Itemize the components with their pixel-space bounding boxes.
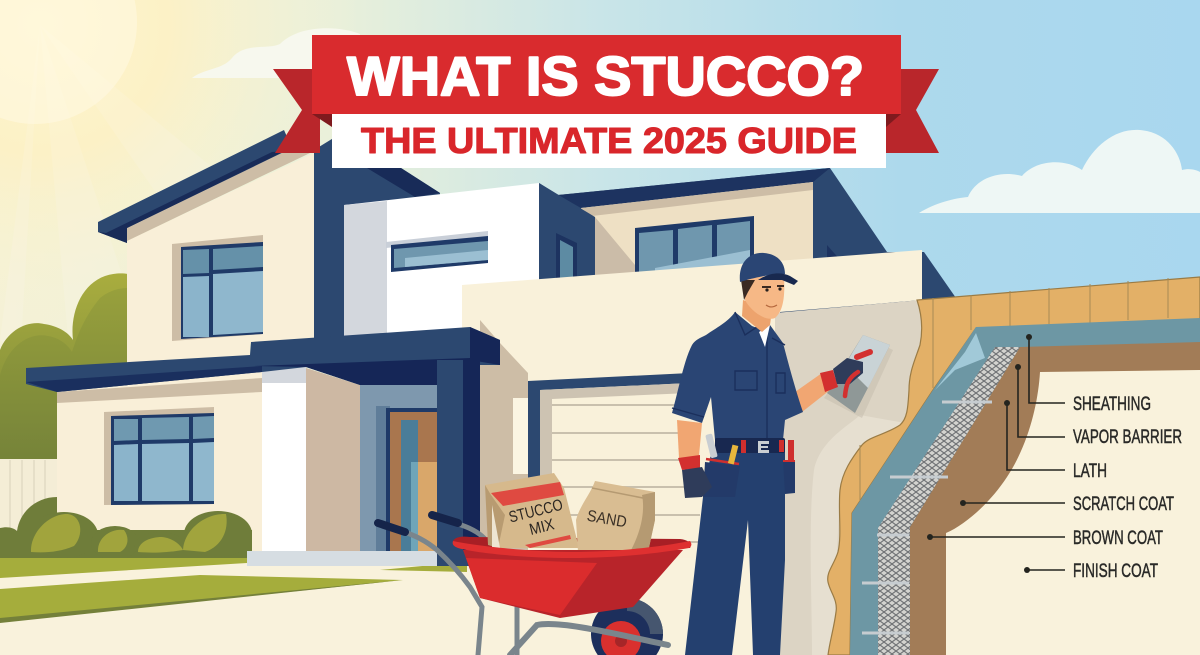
leader: brown coat <box>927 534 1065 540</box>
cutaway: vapor barrier <box>850 318 1200 655</box>
banner red title strip <box>312 35 901 114</box>
leader: finish coat <box>1024 567 1065 573</box>
bag: sand <box>576 481 655 552</box>
background trees <box>0 273 128 462</box>
cloud right <box>919 130 1200 213</box>
porch step <box>247 551 437 566</box>
wheelbarrow <box>453 541 691 655</box>
house: lower wall <box>57 372 262 552</box>
worker: legs <box>685 448 785 655</box>
window: upper left <box>172 235 263 341</box>
navy porch roof <box>26 327 500 392</box>
bag label: stucco: STUCCO <box>507 497 565 527</box>
leader: scratch coat <box>960 500 1065 506</box>
worker: tool pouches <box>703 459 795 497</box>
worker: left glove <box>678 455 712 498</box>
label: sheathing: SHEATHING <box>1073 394 1151 415</box>
label: lath: LATH <box>1073 461 1107 482</box>
house: upper gable wall <box>127 150 314 366</box>
cutaway: finish coat <box>930 365 1200 655</box>
house: gable roof <box>98 130 292 243</box>
cutaway: wood sheathing <box>828 277 1200 655</box>
icon: sun with glow <box>0 0 420 360</box>
wheelbarrow handles <box>378 515 517 655</box>
cutaway: fasteners <box>862 402 992 633</box>
bag: stucco mix <box>485 473 579 548</box>
worker: shirt details <box>672 312 785 438</box>
cutaway: metal lath <box>878 347 1020 655</box>
worker: right forearm <box>795 373 830 412</box>
banner ribbon right tail <box>880 69 939 153</box>
navy post base <box>437 550 480 566</box>
window: lower left <box>104 407 214 505</box>
shrubs <box>0 497 252 560</box>
wheelbarrow tray back rim <box>453 537 691 548</box>
porch <box>306 368 437 552</box>
worker: belt <box>705 433 794 464</box>
worker: cap <box>740 253 798 285</box>
worker: right glove <box>820 352 870 396</box>
wheelbarrow: front rim <box>453 541 691 558</box>
subtitle: THE ULTIMATE 2025 GUIDE <box>361 120 857 161</box>
wheelbarrow: wheel <box>591 598 663 655</box>
lawn and driveway <box>0 558 800 655</box>
title: WHAT IS STUCCO? <box>347 45 864 107</box>
worker <box>672 253 893 655</box>
bag label: sand: SAND <box>586 508 628 531</box>
bag label: mix: MIX <box>528 516 556 539</box>
house: lower wall eave shadow <box>57 378 262 403</box>
wheelbarrow: tray light facet <box>466 558 597 615</box>
fence <box>0 459 57 534</box>
leader: sheathing <box>1026 334 1065 403</box>
label: finish coat: FINISH COAT <box>1073 561 1158 582</box>
worker: left forearm <box>677 420 702 458</box>
worker: collar opening <box>759 325 770 347</box>
banner ribbon left tail <box>273 69 332 153</box>
white porch column <box>262 367 306 552</box>
house: navy central pillar and roof <box>314 134 440 345</box>
leader: lath <box>1004 400 1065 470</box>
house: white block <box>344 183 595 345</box>
wheelbarrow: tray <box>463 550 683 618</box>
stucco plaster area <box>775 300 930 655</box>
banner white subtitle strip <box>332 114 886 168</box>
house: upper right wing <box>539 168 956 320</box>
leader: vapor barrier <box>1015 364 1065 437</box>
worker: shirt and arms <box>672 312 803 440</box>
cloud behind banner <box>192 28 360 78</box>
porch shadow on wall <box>480 320 528 560</box>
worker: neck and face <box>741 275 784 332</box>
worker: trowel <box>824 335 893 418</box>
wheelbarrow: frame <box>510 624 668 655</box>
garage <box>513 373 750 567</box>
label: brown coat: BROWN COAT <box>1073 528 1163 549</box>
navy porch post <box>437 360 480 566</box>
cutaway: brown coat <box>910 342 1200 655</box>
house: large front stucco wall <box>462 250 922 575</box>
